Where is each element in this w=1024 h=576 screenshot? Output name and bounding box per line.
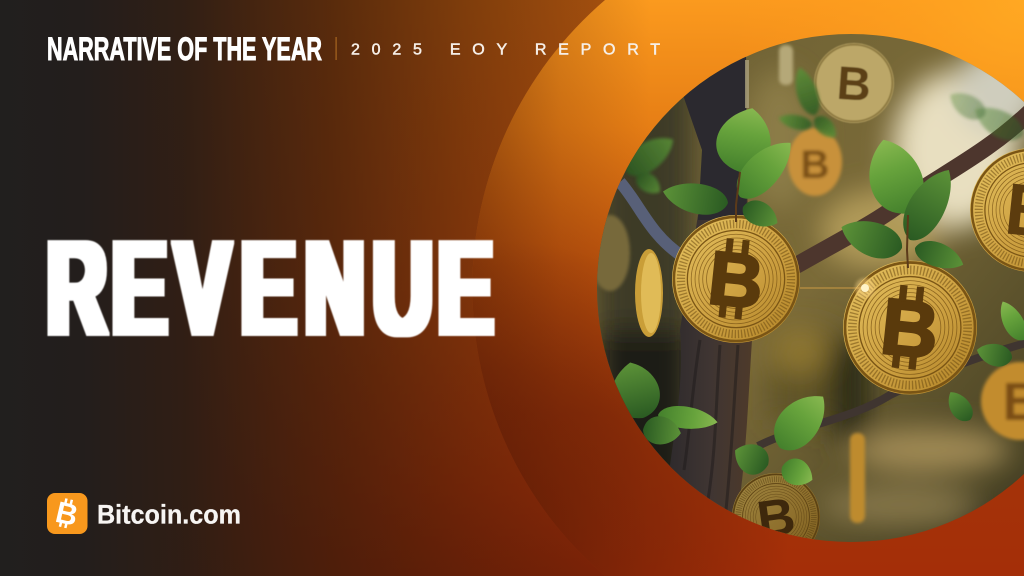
leaves above right coin bbox=[842, 140, 963, 268]
side coin: dim left bbox=[597, 214, 632, 292]
thin hanging coin bbox=[850, 433, 865, 523]
coin: bottom bbox=[732, 473, 820, 540]
blurred coin: middle bbox=[788, 128, 842, 196]
header title: NARRATIVE OF THE YEAR bbox=[47, 31, 322, 67]
photo backdrop: blurred forest bbox=[597, 34, 1024, 542]
leaves lower left bbox=[614, 362, 718, 444]
main heading: REVENUE bbox=[47, 213, 493, 363]
coin: large centre right: B bbox=[877, 281, 943, 375]
branch: lower right bbox=[758, 342, 1024, 446]
thin coin: left bbox=[635, 249, 663, 337]
coin: right bottom blurred bbox=[981, 362, 1024, 440]
header subtitle: 2025 EOY REPORT bbox=[351, 42, 660, 58]
header divider bbox=[336, 37, 337, 60]
icon: bitcoin square: B bbox=[52, 496, 81, 533]
circular photo: coins growing on a tree bbox=[590, 34, 1024, 561]
logo wordmark: Bitcoin.com bbox=[97, 500, 241, 530]
blurred coin: top bbox=[814, 43, 894, 123]
sun flare on coin bbox=[800, 278, 875, 298]
branch: left bbox=[620, 182, 682, 256]
blurred coin: top: B bbox=[835, 57, 873, 112]
coin: bottom: B bbox=[754, 487, 799, 550]
branch: upper right bbox=[797, 112, 1024, 265]
leaves above left coin bbox=[663, 108, 790, 226]
coin: upper right bbox=[970, 148, 1024, 272]
coin: large centre left: B bbox=[704, 236, 767, 325]
tree trunk bbox=[668, 42, 752, 530]
coin: large centre right bbox=[843, 260, 977, 394]
icon: bitcoin square bbox=[47, 493, 88, 534]
large orange arc shape bbox=[472, 0, 1024, 576]
logo: Bitcoin.com bbox=[47, 493, 241, 534]
leaves on lower branch bbox=[729, 297, 1024, 491]
blurred leaves behind coins bbox=[618, 65, 1024, 199]
coin: large centre left bbox=[672, 215, 800, 343]
blurred coin: middle: B bbox=[801, 143, 829, 187]
